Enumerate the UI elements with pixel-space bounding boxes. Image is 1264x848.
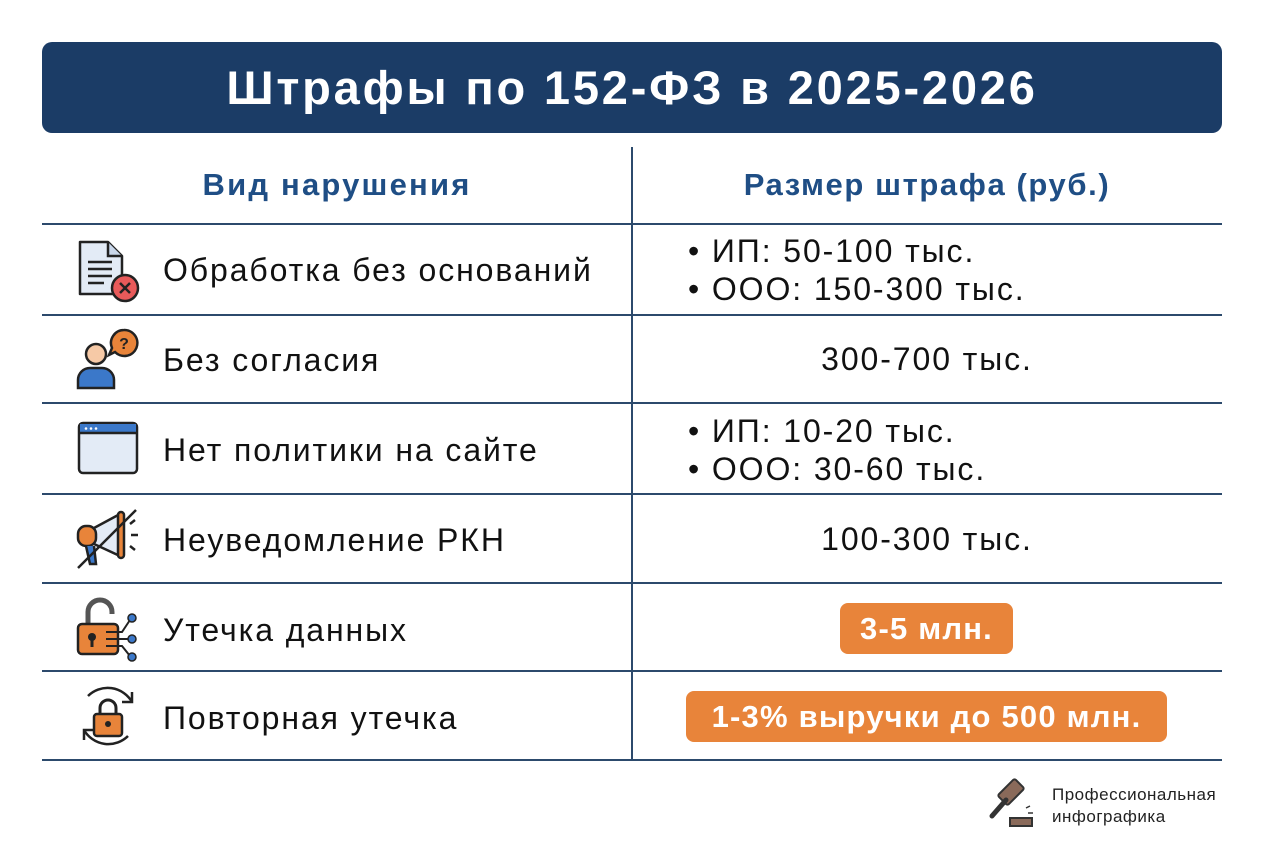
row 6 text: Повторная утечка xyxy=(163,700,458,736)
pill: 1-3% revenue xyxy=(686,691,1167,742)
icon: crossed megaphone xyxy=(76,509,138,569)
icon: person with question: ? xyxy=(119,336,129,353)
row 3 fines xyxy=(688,413,986,487)
row 3 fines: • ООО: 30-60 тыс. xyxy=(688,451,986,487)
footer: logo xyxy=(990,778,1216,827)
header: violation type: Вид нарушения xyxy=(202,167,472,202)
row 3 text: Нет политики на сайте xyxy=(163,432,539,468)
row 1 fines: • ООО: 150-300 тыс. xyxy=(688,271,1026,307)
row 1 text: Обработка без оснований xyxy=(163,252,593,288)
icon: browser window xyxy=(78,422,138,474)
row 4 fine: 100-300 тыс. xyxy=(821,521,1033,557)
row 5 text: Утечка данных xyxy=(163,612,408,648)
row 2 fine: 300-700 тыс. xyxy=(821,341,1033,377)
footer text: Профессиональная xyxy=(1052,785,1216,804)
icon: document with x xyxy=(78,240,140,302)
icon: lock with cycle arrows xyxy=(82,686,134,746)
title xyxy=(42,42,1222,133)
row 2 text: Без согласия xyxy=(163,342,380,378)
pill: 1-3% revenue: 1-3% выручки до 500 млн. xyxy=(712,699,1141,734)
pill: 3-5 mln xyxy=(840,603,1013,654)
icon: gavel xyxy=(990,778,1033,827)
row 1 fines: • ИП: 50-100 тыс. xyxy=(688,233,975,269)
row 4 text: Неуведомление РКН xyxy=(163,522,506,558)
row 3 fines: • ИП: 10-20 тыс. xyxy=(688,413,956,449)
footer text: инфографика xyxy=(1052,807,1166,826)
header: fine size: Размер штрафа (руб.) xyxy=(744,167,1110,202)
icon: open lock with network xyxy=(76,598,137,662)
pill: 3-5 mln: 3-5 млн. xyxy=(860,611,993,646)
footer text xyxy=(1052,785,1216,826)
row 1 fines xyxy=(688,233,1026,307)
title: Штрафы по 152-ФЗ в 2025-2026 xyxy=(226,61,1038,114)
icon: person with question xyxy=(76,328,139,390)
